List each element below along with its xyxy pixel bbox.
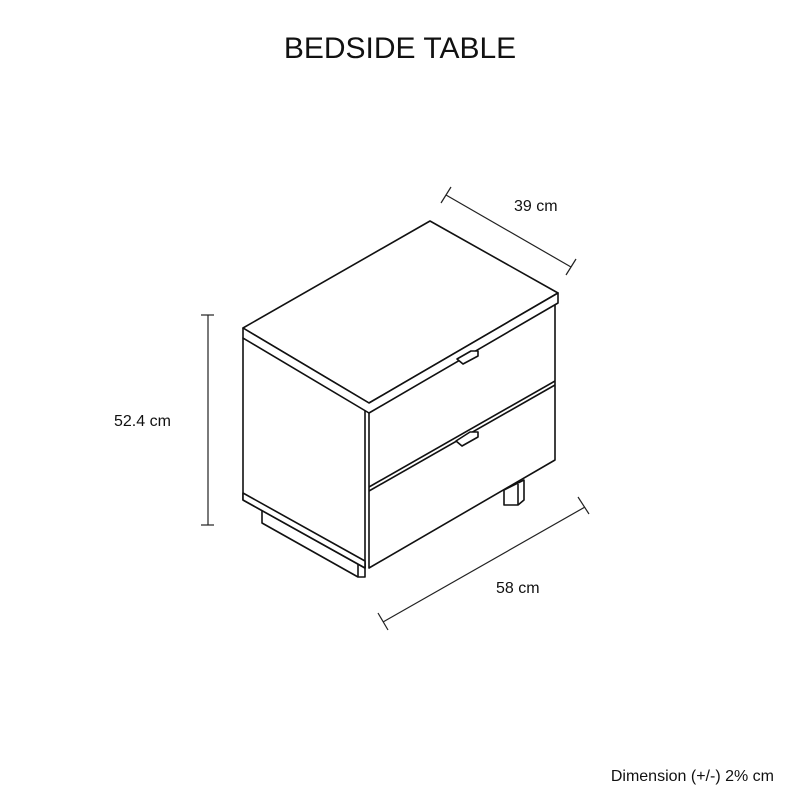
handle top — [457, 351, 478, 364]
text: 58 cm — [496, 580, 540, 597]
front drawers — [365, 303, 555, 568]
back leg — [504, 480, 524, 505]
dimension: 52.4 cm — [201, 315, 214, 525]
top slab — [243, 221, 558, 413]
bedside table drawing — [243, 221, 558, 577]
handle bottom — [456, 432, 478, 446]
dimension: 58 cm — [378, 497, 589, 630]
bottom strip — [243, 493, 365, 568]
side panel — [243, 338, 365, 568]
text: 52.4 cm — [114, 413, 171, 430]
title: BEDSIDE TABLE — [284, 32, 516, 65]
plinth — [262, 509, 365, 577]
footnote: Dimension (+/-) 2% cm — [611, 768, 774, 785]
text: 39 cm — [514, 198, 558, 215]
dimension: 39 cm — [441, 187, 576, 275]
